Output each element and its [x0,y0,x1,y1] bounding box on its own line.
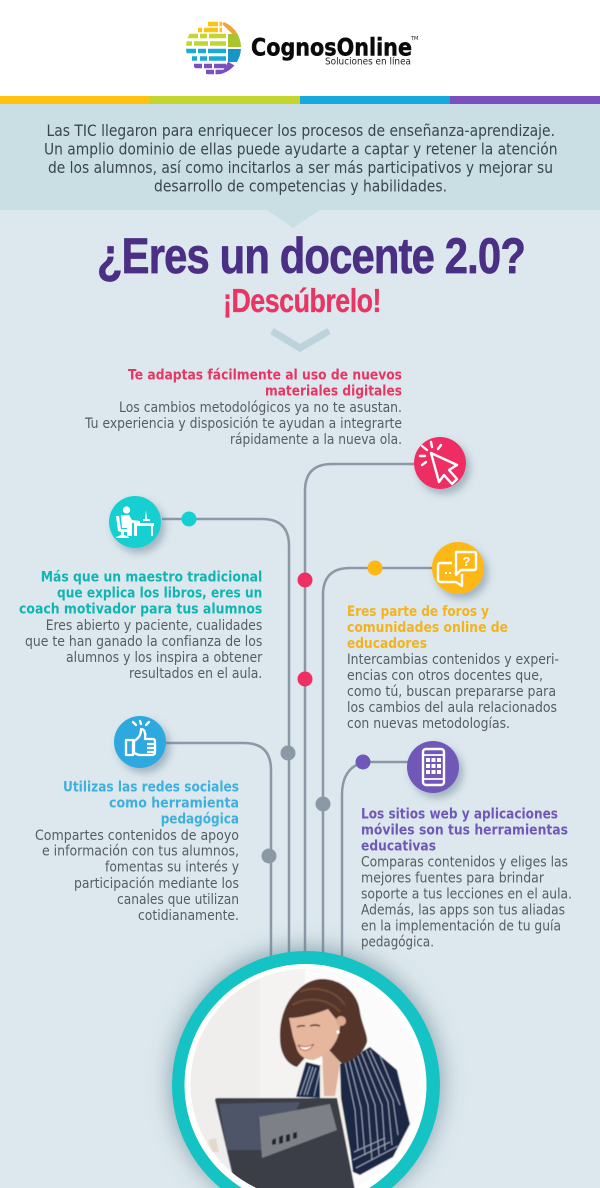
block: sitios web: Los sitios web y aplicaciones [361,806,558,823]
subtitle: ¡Descúbrelo! [223,282,381,319]
icon: mobile phone [407,741,459,793]
block: maestro [19,569,262,682]
block: redes sociales: fomentas su interés y [105,860,239,876]
block: sitios web: Además, las apps son tus aliadas [361,903,565,919]
block: adaptas [84,366,402,448]
icon: thumbs up [114,716,166,768]
icon: globe [186,20,242,76]
laptop [215,1098,355,1188]
icon: cursor [414,437,466,489]
intro text: Las TIC llegaron para enriquecer los procesos de enseñanza-aprendizaje. [46,122,555,140]
block: foros [347,603,559,732]
block: maestro: Más que un maestro tradicional [41,569,262,586]
intro text: desarrollo de competencias y habilidades. [154,178,447,196]
block: adaptas: Tu experiencia y disposición te ayudan a integrarte [84,416,402,432]
block: sitios web: en la implementación de tu guía [361,919,561,935]
block: adaptas: Te adaptas fácilmente al uso de nuevos [128,366,402,383]
desk objects [208,1138,219,1152]
block: redes sociales: Utilizas las redes sociales [63,779,239,796]
block: adaptas: materiales digitales [265,382,402,399]
logo wordmark: CognosOnline [251,34,412,62]
chevron [272,331,329,348]
title: ¿Eres un docente 2.0? [97,228,525,284]
photo medallion [172,951,440,1188]
trademark: TM [410,36,418,42]
block: maestro: que explica los libros, eres un [57,585,262,602]
white ring [184,964,426,1188]
block: maestro: alumnos y los inspira a obtener [66,650,262,666]
block: adaptas: Los cambios metodológicos ya no te asustan. [119,400,402,416]
block: redes sociales: cotidianamente. [138,908,239,924]
header logo [0,0,600,96]
face [289,1009,340,1060]
teal ring [172,951,440,1188]
connector dots [182,512,382,864]
block: redes sociales: Compartes contenidos de apoyo [35,828,239,844]
block: foros: como tú, buscan prepararse para [347,684,556,700]
block: redes sociales: e información con tus alumnos, [42,844,239,860]
block: sitios web: mejores fuentes para brindar [361,871,544,887]
block: foros: comunidades online de [347,619,508,636]
block: sitios web: móviles son tus herramientas [361,822,568,839]
logo tagline: Soluciones en línea [325,56,411,68]
block: foros: con nuevas metodologías. [347,716,510,732]
connector lines [162,464,458,960]
icon: chat [432,542,484,594]
block: sitios web: pedagógica. [361,935,434,951]
block: redes sociales: como herramienta [109,795,239,812]
block: foros: encias con otros docentes que, [347,668,543,684]
block: adaptas: rápidamente a la nueva ola. [230,432,402,448]
block: sitios web: Comparas contenidos y eliges las [361,855,568,871]
block: foros: educadores [347,635,427,652]
intro text [44,122,558,196]
block: maestro: Eres abierto y paciente, cualidades [46,618,262,634]
block: maestro: coach motivador para tus alumnos [19,601,262,618]
block: redes sociales: pedagógica [161,811,239,828]
block: redes sociales [35,779,239,924]
hair [280,979,367,1067]
block: foros: Eres parte de foros y [347,603,489,620]
block: maestro: que te han ganado la confianza de los [25,634,262,650]
intro band [0,104,600,228]
block: sitios web: soporte a tus lecciones en el aula. [361,887,572,903]
blouse [320,1064,350,1150]
block: sitios web: educativas [361,838,436,855]
block: redes sociales: canales que utilizan [117,892,239,908]
icon: person at desk [109,496,161,548]
block: sitios web [361,806,572,951]
block: foros: Intercambias contenidos y experi- [347,652,559,668]
blazer [296,1062,322,1098]
block: redes sociales: participación mediante los [74,876,239,892]
block: foros: los cambios del aula relacionados [347,700,557,716]
icon: chat: ? [462,554,470,569]
block: maestro: resultados en el aula. [129,666,262,682]
photo: teacher with laptop [190,969,411,1188]
neck [322,1045,340,1096]
colour strip [0,96,600,104]
